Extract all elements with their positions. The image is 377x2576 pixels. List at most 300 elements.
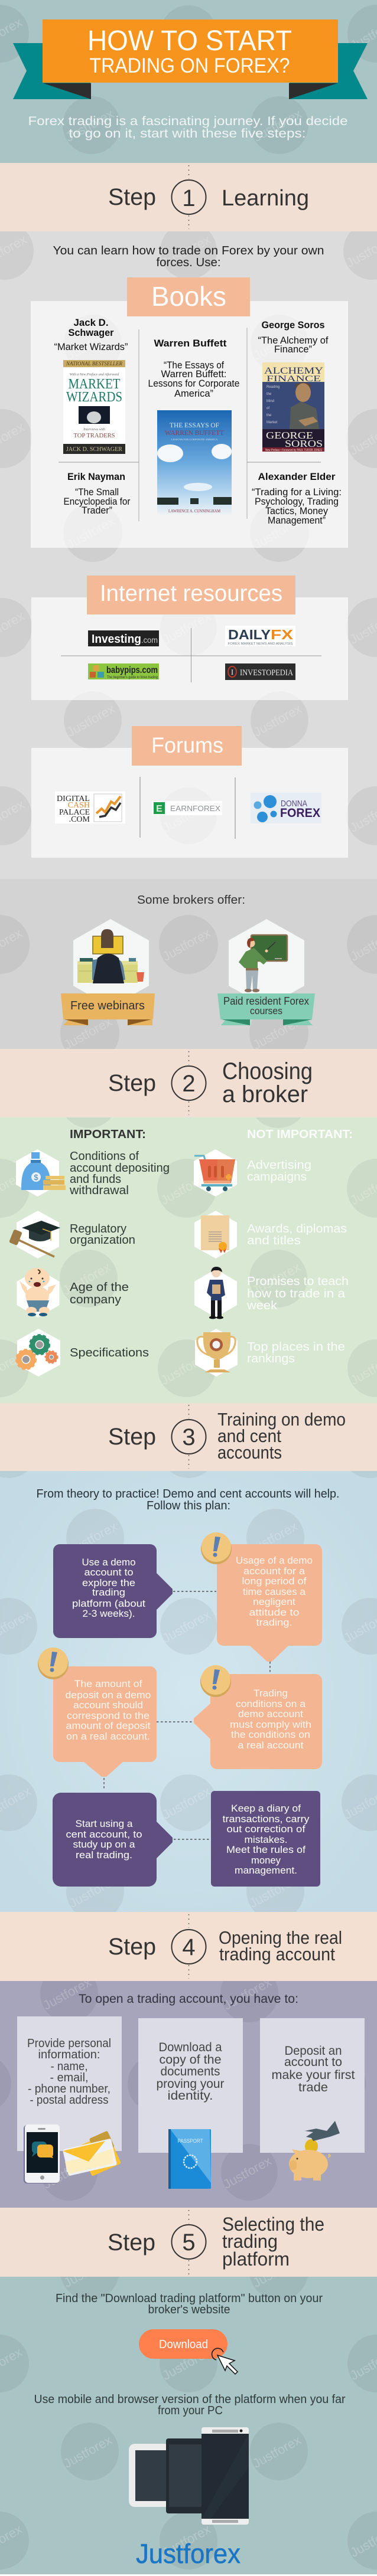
step 5 heading band: Step xyxy=(108,2230,155,2255)
text: Justforex xyxy=(251,701,304,740)
heading: books xyxy=(127,277,250,316)
text: Justforex xyxy=(40,1975,93,2013)
text: promises: how to trade in a xyxy=(247,1287,346,1300)
text: Justforex xyxy=(158,1169,211,1208)
box: usage of a demo account: long period of xyxy=(242,1575,307,1587)
item: advertising campaigns xyxy=(194,1149,311,1197)
text: promises: week xyxy=(246,1299,278,1312)
box: trading conditions: Trading xyxy=(254,1688,288,1699)
book cover: The Alchemy of Finance: Reading xyxy=(266,385,280,389)
logo: Digital Cash Palace: DIGITAL xyxy=(57,795,90,803)
logo: Donna Forex xyxy=(251,793,321,823)
section: brokers background xyxy=(0,879,377,1049)
box: use a demo account: account to xyxy=(84,1567,134,1578)
logo: Digital Cash Palace: PALACE xyxy=(59,808,90,817)
book: Market Wizards text: “Market Wizards” xyxy=(54,341,128,352)
item: promises to teach xyxy=(194,1267,349,1319)
box: usage of a demo account: account for a xyxy=(243,1565,306,1577)
text: regulatory: organization xyxy=(70,1234,135,1247)
box: trading conditions: must comply with xyxy=(230,1719,311,1730)
text: awards: and titles xyxy=(247,1234,301,1247)
box: amount of deposit: on a real account. xyxy=(66,1731,150,1742)
book cover: Market Wizards: NATIONAL BESTSELLER xyxy=(66,361,122,367)
text: Justforex xyxy=(160,420,213,458)
text: Justforex xyxy=(250,2433,303,2471)
title xyxy=(87,25,292,77)
icon: money bag and coins: $ xyxy=(34,1173,38,1182)
book cover: The Alchemy of Finance: ALCHEMY xyxy=(264,366,324,376)
text: advertising xyxy=(247,1159,311,1184)
box: keep a diary: out correction of xyxy=(227,1823,306,1835)
card: provide personal information: - postal address xyxy=(30,2094,109,2107)
text: Justforex xyxy=(220,1975,274,2013)
text: conditions of account: Conditions of xyxy=(70,1150,139,1163)
book cover: Market Wizards xyxy=(63,360,125,454)
book cover: The Essays of Warren Buffett: LAWRENCE A. CUNNINGHAM xyxy=(168,508,220,514)
box: trading conditions: the conditions on xyxy=(231,1729,310,1740)
book: Alchemy of Finance text: “The Alchemy of xyxy=(258,335,329,346)
book cover: The Essays of Warren Buffett: THE ESSAYS OF xyxy=(170,421,219,429)
box: keep a diary: mistakes. xyxy=(245,1834,287,1845)
book cover: Market Wizards: Interviews with xyxy=(83,428,105,431)
learning intro text: You can learn how to trade on Forex by your own xyxy=(53,244,324,257)
box: trading conditions: demo account xyxy=(238,1708,303,1719)
text: Justforex xyxy=(251,325,304,363)
card: deposit an account: make your first xyxy=(272,2068,355,2082)
step 2 heading band: a broker xyxy=(222,1081,308,1107)
mobile and browser text: Use mobile and browser version of the platform when you far xyxy=(34,2393,346,2406)
demo accounts intro text: From theory to practice! Demo and cent accounts will help. xyxy=(37,1488,339,1501)
text: conditions of account: and funds xyxy=(70,1173,121,1186)
find download button text: broker's website xyxy=(148,2303,230,2316)
book cover: The Essays of Warren Buffett xyxy=(157,410,232,515)
text: awards: Awards, diplomas xyxy=(247,1222,347,1235)
step 5 heading band xyxy=(0,2208,377,2277)
demo accounts intro text: Follow this plan: xyxy=(147,1499,230,1512)
logo: babypips.com xyxy=(88,663,159,679)
step 2 heading band: Step xyxy=(108,1070,156,1096)
text: Justforex xyxy=(250,2252,303,2290)
section: learning background xyxy=(0,231,377,879)
box: keep a diary: money xyxy=(251,1855,281,1866)
text: Justforex xyxy=(160,609,213,647)
text: Justforex xyxy=(246,1519,300,1557)
item: awards and diplomas xyxy=(194,1211,347,1258)
title ribbon xyxy=(13,19,368,99)
column heading: important: IMPORTANT: xyxy=(70,1128,146,1141)
heading: forums: Forums xyxy=(151,733,223,757)
text: Justforex xyxy=(61,2433,114,2471)
banner: free webinars xyxy=(61,993,155,1025)
text: conditions of account: withdrawal xyxy=(69,1184,129,1197)
text: Justforex xyxy=(250,1014,303,1052)
icon: passport: PASSPORT xyxy=(177,2138,203,2144)
real account intro text: To open a trading account, you have to: xyxy=(79,1992,298,2006)
box: usage of a demo account: Usage of a demo xyxy=(236,1555,313,1566)
banner: paid resident courses: Paid resident Forex xyxy=(223,995,309,1007)
book: Trading for a Living text: Tactics, Money xyxy=(265,505,328,516)
heading: books: Books xyxy=(151,281,226,312)
book: Small Encyclopedia text: “The Small xyxy=(75,486,119,498)
text: Justforex xyxy=(160,232,213,270)
step 4 heading band: trading account xyxy=(219,1944,335,1964)
icon: devices xyxy=(129,2427,249,2525)
book cover: Market Wizards: MARKET xyxy=(69,377,121,392)
step 3 heading band xyxy=(0,1403,377,1471)
step 2 heading band: 2 xyxy=(182,1071,196,1097)
text: specifications: Specifications xyxy=(70,1346,149,1359)
step 3 heading band: Training on demo xyxy=(217,1409,346,1430)
banner: paid resident courses xyxy=(217,993,315,1025)
text: age: Age of the xyxy=(70,1281,129,1294)
box: amount of deposit: deposit on a demo xyxy=(65,1689,151,1701)
icon: exclamation badge xyxy=(38,1647,69,1679)
text: conditions of account: account depositing xyxy=(70,1162,170,1175)
card: deposit an account: account to xyxy=(284,2055,342,2069)
section: intro background xyxy=(0,0,377,163)
step 5 heading band: Selecting the xyxy=(222,2214,324,2235)
find download button text xyxy=(56,2292,323,2316)
logo: Investing.com: Investing xyxy=(92,633,141,646)
text: Justforex xyxy=(160,926,213,964)
book cover: The Alchemy of Finance: of xyxy=(266,407,269,410)
text: Justforex xyxy=(251,514,304,552)
step 2 heading band: Choosing xyxy=(222,1058,313,1084)
find download button text: Find the "Download trading platform" button on your xyxy=(56,2292,323,2305)
box: amount of deposit: correspond to the xyxy=(67,1710,150,1721)
book: Alchemy of Finance text xyxy=(258,319,329,355)
step 4 heading band: Opening the real xyxy=(219,1927,342,1948)
book cover: The Alchemy of Finance xyxy=(262,362,324,452)
logo: Investopedia xyxy=(225,663,295,680)
box: use a demo account: platform (about xyxy=(72,1598,145,1609)
card: deposit an account: Deposit an xyxy=(285,2044,342,2058)
icon: envelopes xyxy=(63,2130,121,2176)
book: Small Encyclopedia text: Encyclopedia for xyxy=(64,496,131,507)
logo: DailyFX: FX xyxy=(271,627,294,642)
book cover: Market Wizards: TOP TRADERS xyxy=(73,432,115,439)
mobile and browser text: from your PC xyxy=(158,2404,223,2417)
icon: phone xyxy=(24,2124,60,2183)
step 1 heading band: 1 xyxy=(182,185,196,211)
box: keep a diary: Meet the rules of xyxy=(226,1844,306,1855)
step 3 heading band: accounts xyxy=(217,1442,282,1463)
card: provide personal information: - name, xyxy=(51,2060,87,2073)
step 5 heading band: platform xyxy=(222,2248,290,2270)
box: trading conditions: a real account xyxy=(238,1740,304,1751)
box: usage of a demo account xyxy=(201,1532,322,1662)
item: regulatory organization xyxy=(9,1211,135,1258)
logo: Investing.com xyxy=(88,630,159,646)
box: start using a cent account: real trading. xyxy=(76,1849,132,1861)
icon: piggy bank and coin xyxy=(289,2121,340,2181)
heading: forums xyxy=(132,726,242,766)
book cover: Market Wizards: JACK D. SCHWAGER xyxy=(66,446,123,453)
step 1 heading band xyxy=(0,163,377,231)
text: Justforex xyxy=(61,2252,114,2290)
demo accounts intro text xyxy=(37,1488,339,1512)
text: Justforex xyxy=(61,1014,114,1052)
card: download documents: identity. xyxy=(168,2089,213,2103)
book: Market Wizards text: Jack D. xyxy=(73,317,109,328)
icon: diploma xyxy=(201,1215,229,1253)
mobile and browser text xyxy=(34,2393,346,2417)
book: Trading for a Living text: Management” xyxy=(268,515,326,526)
book cover: The Alchemy of Finance: GEORGE xyxy=(266,430,313,441)
box: start using a cent account: study up on a xyxy=(73,1839,135,1850)
book cover: Market Wizards: With a New Preface and Afterword xyxy=(70,372,119,377)
logo: Investopedia: I xyxy=(231,668,233,676)
logo: babypips.com: The beginner's guide to forex trading xyxy=(107,676,158,679)
card: provide personal information: Provide personal xyxy=(27,2037,111,2050)
panel: books xyxy=(31,277,348,548)
book cover: The Alchemy of Finance: FINANCE xyxy=(266,374,321,384)
logo: Digital Cash Palace: CASH xyxy=(68,801,90,810)
step 4 heading band: Step xyxy=(108,1934,156,1960)
book cover: The Alchemy of Finance: Market xyxy=(266,421,278,424)
icon: teacher at blackboard xyxy=(239,935,287,992)
step 4 heading band: 4 xyxy=(182,1934,196,1960)
box: usage of a demo account: attitude to xyxy=(249,1607,299,1618)
book cover: The Essays of Warren Buffett: LESSONS FOR CORPORATE AMERICA xyxy=(171,438,218,441)
card: download documents: copy of the xyxy=(160,2053,221,2067)
text: Justforex xyxy=(60,1260,113,1298)
icon: gavel and graduation cap xyxy=(9,1221,60,1257)
logo: babypips.com: babypips.com xyxy=(106,665,158,675)
box: start using a cent account xyxy=(53,1793,173,1887)
book: Market Wizards text: Schwager xyxy=(69,327,114,338)
box: usage of a demo account: time causes a xyxy=(243,1586,306,1597)
logo: EarnForex xyxy=(152,801,222,815)
box: amount of deposit: amount of deposit xyxy=(66,1720,151,1731)
box: keep a diary: transactions, carry xyxy=(222,1813,310,1825)
book: Small Encyclopedia text xyxy=(64,471,131,516)
icon: passport xyxy=(168,2129,211,2189)
book cover: The Alchemy of Finance: New Preface • Foreword by PAUL TUDOR JONES xyxy=(265,449,323,452)
text: Justforex xyxy=(66,1872,119,1911)
learning intro text: forces. Use: xyxy=(156,256,221,269)
book cover: Market Wizards: WIZARDS xyxy=(66,390,122,405)
step 5 heading band: trading xyxy=(222,2231,278,2252)
book cover: The Alchemy of Finance: SOROS xyxy=(285,438,323,449)
intro text: Forex trading is a fascinating journey. If you decide xyxy=(28,115,347,128)
card: download documents xyxy=(138,2018,243,2189)
logo: Digital Cash Palace xyxy=(55,792,125,824)
book: Small Encyclopedia text: Trader” xyxy=(82,505,112,516)
heading: internet resources xyxy=(87,576,295,614)
item: age of the company xyxy=(17,1268,129,1318)
box: use a demo account: Use a demo xyxy=(82,1557,136,1568)
learning intro text xyxy=(53,244,324,269)
book cover: The Essays of Warren Buffett: WARREN BUFFETT xyxy=(165,429,225,437)
box: amount of deposit: account should xyxy=(73,1699,143,1711)
card: download documents: proving your xyxy=(156,2077,225,2091)
text: Justforex xyxy=(40,2153,93,2192)
book: Warren Buffett text: America” xyxy=(174,388,213,399)
card: paid resident Forex courses xyxy=(217,919,315,1025)
card: free webinars xyxy=(61,919,155,1025)
card: provide personal information xyxy=(17,2016,122,2183)
text: Justforex xyxy=(63,106,116,145)
text: Justforex xyxy=(160,2345,213,2383)
step 1 heading band: Step xyxy=(108,184,156,210)
text: Justforex xyxy=(160,2522,213,2560)
logo: Investing.com: .com xyxy=(141,635,158,645)
box: start using a cent account: Start using a xyxy=(76,1818,133,1829)
box: keep a diary: management. xyxy=(235,1865,297,1876)
box: start using a cent account: cent account, to xyxy=(66,1829,142,1840)
book: Market Wizards text xyxy=(54,317,128,352)
logo: EarnForex: EARNFOREX xyxy=(170,804,220,813)
logo: Investopedia: INVESTOPEDIA xyxy=(240,668,293,678)
book cover: The Alchemy of Finance: Mind xyxy=(266,400,274,403)
box: usage of a demo account: negligent xyxy=(253,1596,295,1607)
text: top places: Top places in the xyxy=(247,1341,345,1354)
icon: person at webinar desk xyxy=(77,929,144,983)
icon: shopping cart xyxy=(194,1156,235,1191)
book: Alchemy of Finance text: Finance” xyxy=(274,344,312,355)
text: Justforex xyxy=(246,1872,300,1911)
text: promises xyxy=(246,1275,349,1312)
text: Justforex xyxy=(64,514,117,552)
text: Justforex xyxy=(249,1260,303,1298)
text: conditions of account xyxy=(69,1150,170,1197)
button: download: Download xyxy=(159,2338,208,2351)
text: Justforex xyxy=(160,1607,213,1646)
box: use a demo account: trading xyxy=(92,1587,125,1598)
icon: exclamation badge xyxy=(200,1665,231,1697)
title: TRADING ON FOREX? xyxy=(90,54,290,77)
icon: crying baby xyxy=(20,1268,56,1316)
icon: mouse cursor xyxy=(212,2348,238,2374)
section: demo accounts background xyxy=(0,1471,377,1912)
text: Justforex xyxy=(251,106,304,145)
some brokers offer text: Some brokers offer: xyxy=(137,894,245,907)
text: promises: Promises to teach xyxy=(247,1275,349,1288)
text: Justforex xyxy=(160,15,213,53)
connector lines xyxy=(104,1591,270,1839)
item: top places in rankings xyxy=(195,1329,345,1377)
intro text xyxy=(28,115,347,140)
icon: gears xyxy=(17,1335,57,1369)
section: real account background xyxy=(0,1981,377,2208)
title: HOW TO START xyxy=(87,25,292,57)
text: Justforex xyxy=(64,325,117,363)
book: Alchemy of Finance text: George Soros xyxy=(261,319,325,331)
section: platform background xyxy=(0,2277,377,2574)
logo: DailyFX: DAILY xyxy=(228,627,271,642)
box: keep a diary: Keep a diary of xyxy=(231,1803,301,1814)
section: broker criteria background xyxy=(0,1117,377,1403)
step 4 heading band xyxy=(0,1912,377,1981)
logo: Donna Forex: FOREX xyxy=(280,806,320,820)
text: advertising: campaigns xyxy=(247,1171,307,1184)
book: Warren Buffett text: Warren Buffett: xyxy=(161,368,227,380)
item: specifications xyxy=(17,1329,149,1377)
text: Justforex xyxy=(66,1519,119,1557)
logo: DailyFX xyxy=(225,626,295,646)
book: Trading for a Living text xyxy=(252,471,342,526)
text: Justforex xyxy=(64,701,117,740)
text: Justforex xyxy=(160,1784,213,1822)
text: regulatory xyxy=(70,1222,135,1247)
box: use a demo account: explore the xyxy=(82,1577,135,1588)
box: trading conditions xyxy=(194,1665,322,1769)
logo: Justforex: Justforex xyxy=(136,2538,240,2569)
item: account conditions xyxy=(16,1149,170,1197)
panel: internet resources xyxy=(31,576,348,700)
book cover: The Alchemy of Finance: the xyxy=(266,414,272,417)
logo: Digital Cash Palace: .COM xyxy=(69,815,90,824)
step 3 heading band: Step xyxy=(108,1424,156,1450)
box: amount of deposit: The amount of xyxy=(74,1678,142,1689)
banner: paid resident courses: courses xyxy=(250,1005,282,1016)
book: Warren Buffett text: Lessons for Corporate xyxy=(148,378,240,389)
step 3 heading band: 3 xyxy=(182,1424,196,1450)
card: deposit an account: trade xyxy=(298,2081,328,2094)
card: download documents: Download a xyxy=(158,2041,222,2054)
card: provide personal information: - phone number, xyxy=(28,2083,110,2096)
icon: exclamation badge xyxy=(201,1532,232,1564)
text: Justforex xyxy=(158,1349,211,1388)
intro text: to go on it, start with these five steps: xyxy=(69,127,306,140)
heading: internet resources: Internet resources xyxy=(100,581,282,606)
column heading: not important: NOT IMPORTANT: xyxy=(247,1128,353,1141)
panel: forums xyxy=(31,726,348,858)
icon: trophy xyxy=(197,1332,235,1372)
book: Warren Buffett text: Warren Buffett xyxy=(154,338,227,349)
step 3 heading band: and cent xyxy=(217,1426,281,1446)
box: trading conditions: conditions on a xyxy=(236,1698,306,1709)
logo: DailyFX: FOREX MARKET NEWS AND ANALYSIS xyxy=(228,642,293,646)
text: awards xyxy=(247,1222,347,1247)
button: download xyxy=(139,2329,228,2359)
logo: Donna Forex: DONNA xyxy=(281,799,307,809)
book: Warren Buffett text: “The Essays of xyxy=(164,359,224,371)
card: provide personal information: information: xyxy=(38,2048,100,2061)
step 1 heading band: Learning xyxy=(222,186,309,211)
box: use a demo account xyxy=(53,1544,173,1638)
box: usage of a demo account: trading. xyxy=(256,1617,292,1628)
text: top places xyxy=(247,1341,345,1365)
step 2 heading band xyxy=(0,1049,377,1117)
book: Trading for a Living text: “Trading for a Living: xyxy=(252,486,342,498)
card: provide personal information: - email, xyxy=(50,2071,89,2084)
banner: free webinars: Free webinars xyxy=(70,999,145,1012)
book cover: The Alchemy of Finance: the xyxy=(266,393,272,396)
box: amount of deposit xyxy=(38,1647,157,1777)
icon: salesman xyxy=(207,1267,225,1319)
book: Small Encyclopedia text: Erik Nayman xyxy=(67,471,125,482)
book: Trading for a Living text: Alexander Elder xyxy=(258,471,336,482)
text: Justforex xyxy=(160,797,213,835)
text: advertising: Advertising xyxy=(247,1159,311,1172)
icon: money bag and coins xyxy=(21,1152,66,1190)
card: download documents: documents xyxy=(161,2065,220,2078)
text: age xyxy=(70,1281,129,1306)
step 5 heading band: 5 xyxy=(182,2230,196,2255)
logo: EarnForex: E xyxy=(156,804,162,814)
text: regulatory: Regulatory xyxy=(70,1222,126,1235)
card: deposit an account xyxy=(260,2018,365,2181)
text: Justforex xyxy=(220,2153,274,2192)
text: top places: rankings xyxy=(247,1352,295,1365)
book: Trading for a Living text: Psychology, Trading xyxy=(255,496,339,507)
text: age: company xyxy=(70,1293,121,1306)
book: Warren Buffett text xyxy=(148,338,240,399)
box: use a demo account: 2-3 weeks). xyxy=(83,1608,135,1619)
box: keep a diary xyxy=(211,1791,320,1887)
